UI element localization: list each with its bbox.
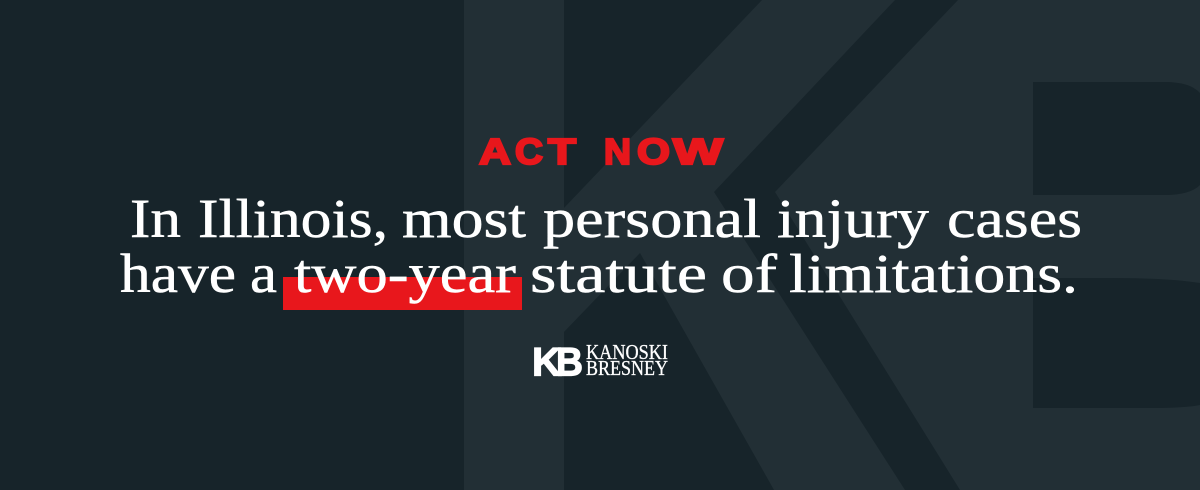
statement line 1: most [402,188,526,249]
heading: ACT NOW: C [515,131,543,172]
logo: Kanoski Bresney [532,340,668,384]
statement line 1: personal [543,188,761,249]
statement line 2: have [120,243,236,304]
watermark: large KB monogram [464,0,1200,490]
heading: ACT NOW: A [479,131,511,172]
statement line 2: of [721,243,778,304]
heading: ACT NOW: W [673,131,724,172]
heading: ACT NOW [479,131,724,172]
statement line 1: In [130,188,181,249]
statement line 1: Illinois, [198,188,388,249]
statement line 1 [130,188,1082,249]
statement line 2 [120,243,1078,304]
logo monogram [532,340,583,384]
statement line 2: two-year [294,243,516,304]
statement line 2: statute [530,243,707,304]
logo monogram: B [556,340,583,384]
statement line 1: injury [777,188,930,249]
statement line 1: cases [947,188,1082,249]
logo monogram: K [532,340,561,384]
heading: ACT NOW: N [604,131,631,172]
heading: ACT NOW: O [637,131,670,172]
statement line 2: a [250,243,277,304]
logo wordmark: Bresney: BRESNEY [586,356,668,380]
statement line 2: limitations. [789,243,1078,304]
logo wordmark: Kanoski: KANOSKI [586,340,668,364]
heading: ACT NOW: T [548,131,576,172]
highlight bar behind two-year [283,277,522,310]
